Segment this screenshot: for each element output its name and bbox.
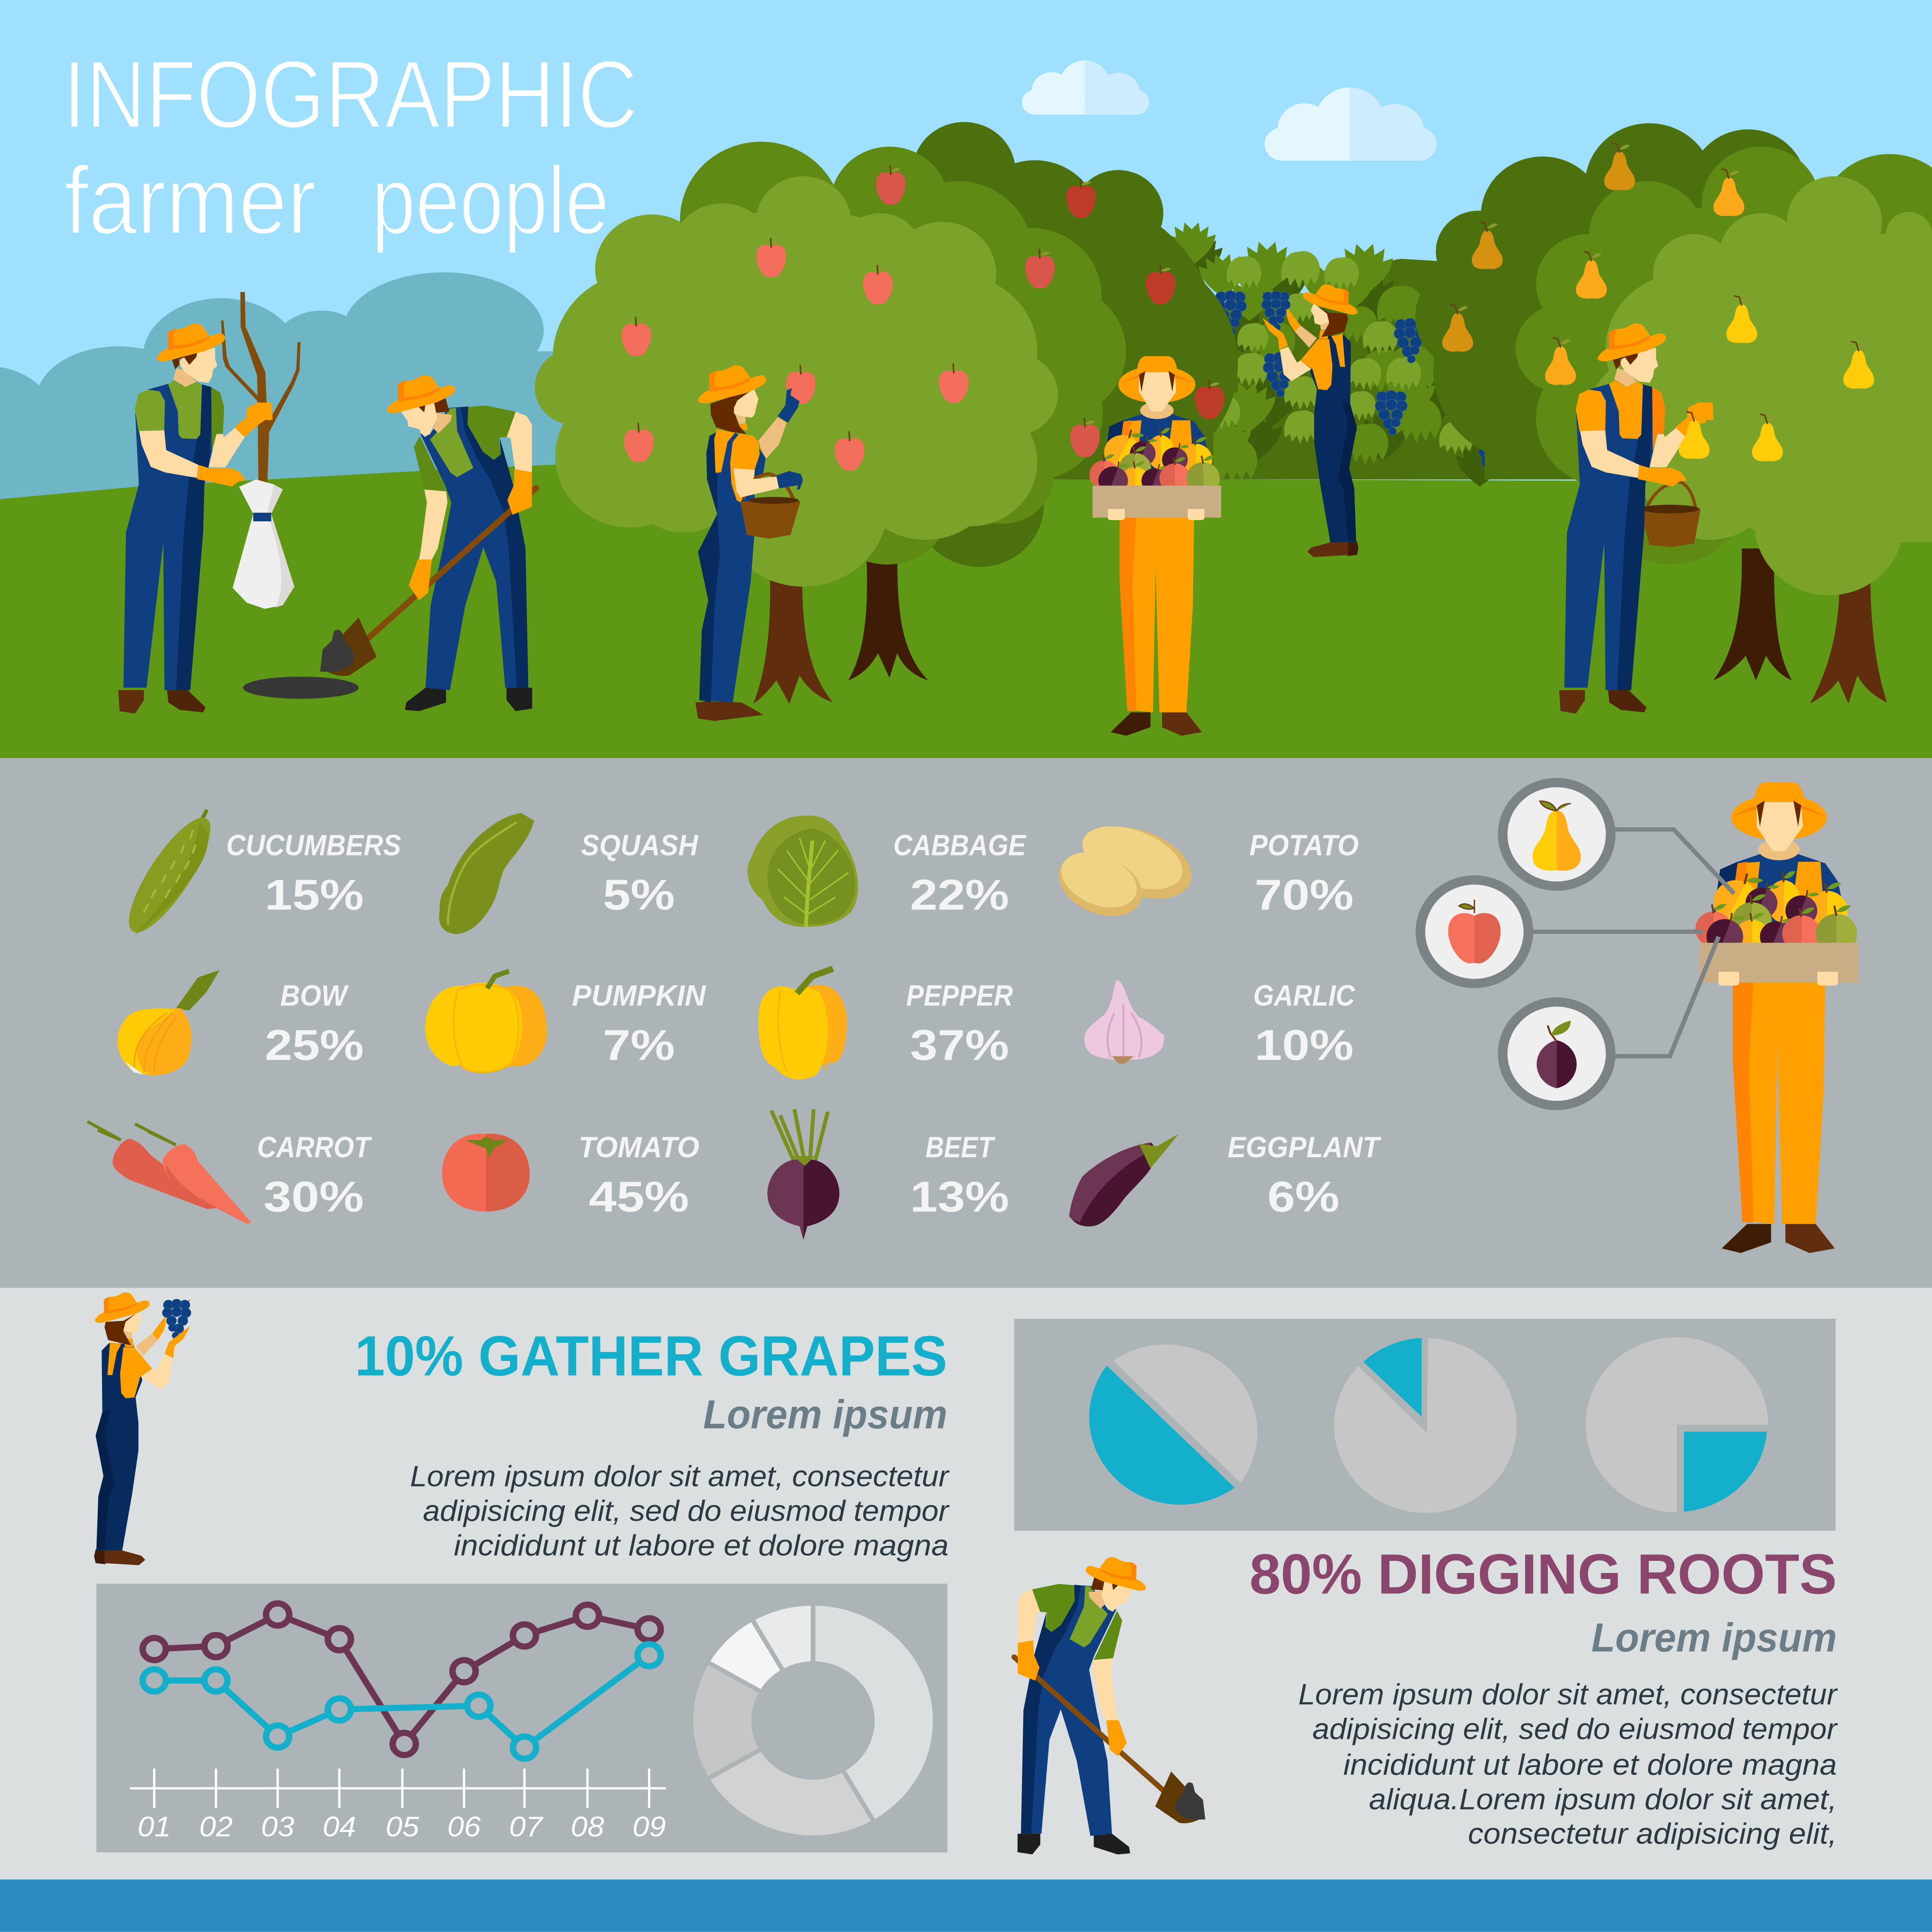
- vegetable labels: GARLIC: [1253, 979, 1355, 1012]
- icon: beet: [767, 1109, 839, 1240]
- farmer picking pears: [1559, 323, 1713, 714]
- icon: carrots: [87, 1122, 251, 1224]
- subheading: Lorem ipsum: [703, 1392, 947, 1437]
- pear trees: [1415, 123, 1932, 704]
- sapling: [221, 292, 301, 483]
- back pear tree: [1415, 123, 1806, 480]
- heading: gather grapes: 10% GATHER GRAPES: [355, 1324, 947, 1388]
- vegetable labels: 5%: [603, 871, 675, 919]
- series: blue: [143, 1644, 661, 1759]
- axis labels: 04: [323, 1811, 356, 1842]
- vegetable labels: CUCUMBERS: [226, 828, 401, 862]
- vegetable labels: 70%: [1255, 871, 1354, 919]
- axis labels: 07: [509, 1811, 543, 1842]
- light leaves: [1206, 251, 1474, 455]
- axis: [130, 1769, 666, 1808]
- clouds: [1022, 60, 1437, 161]
- text block: digging roots: adipisicing elit, sed do eiusmod tempor: [1313, 1712, 1838, 1745]
- axis labels: 02: [199, 1811, 233, 1842]
- icon: tomato: [442, 1134, 530, 1211]
- vegetable labels: 7%: [603, 1021, 675, 1070]
- vegetable labels: CABBAGE: [893, 828, 1027, 862]
- vegetable labels: PEPPER: [906, 979, 1013, 1012]
- vegetable labels: BOW: [280, 979, 349, 1012]
- tree trunks: [753, 554, 928, 704]
- grape vines: [1168, 223, 1504, 486]
- donut chart: [691, 1604, 935, 1838]
- front tree: [535, 176, 1058, 587]
- man digging: [1014, 1557, 1205, 1854]
- icon: garlic: [1084, 980, 1164, 1064]
- text block: digging roots: incididunt ut labore et dolore magna: [1343, 1748, 1837, 1781]
- farmer digging: [320, 375, 536, 711]
- vegetable labels: 22%: [910, 871, 1009, 919]
- axis labels: 03: [261, 1811, 294, 1842]
- vegetable labels: 13%: [910, 1173, 1009, 1221]
- icon: apple circle: [1420, 880, 1528, 983]
- subheading: Lorem ipsum: [1591, 1615, 1837, 1660]
- text block: gather grapes: incididunt ut labore et dolore magna: [454, 1529, 949, 1562]
- vegetable labels: BEET: [925, 1131, 996, 1164]
- farmer figure: [1696, 782, 1859, 1253]
- front pear tree: [1587, 176, 1932, 595]
- woman picking apples: [696, 365, 803, 721]
- farmer figure: [1559, 323, 1713, 714]
- pie 2: [1334, 1338, 1517, 1513]
- farmer planting sapling: [118, 292, 359, 714]
- line chart: [130, 1604, 666, 1842]
- text block: digging roots: Lorem ipsum dolor sit amet, consectetur: [1298, 1678, 1838, 1711]
- ground: [0, 460, 1932, 759]
- footer bar: [0, 1879, 1932, 1932]
- text block: digging roots: [1298, 1678, 1838, 1850]
- apples: [621, 165, 1225, 471]
- axis labels: 09: [633, 1811, 666, 1842]
- vegetable labels: [226, 828, 1381, 1221]
- axis labels: 05: [386, 1811, 419, 1842]
- vegetable labels: 37%: [910, 1021, 1009, 1070]
- hole: [243, 677, 359, 699]
- icon: pumpkin: [425, 971, 547, 1072]
- root sack: [233, 480, 294, 609]
- vegetable labels: 45%: [589, 1173, 689, 1221]
- panel: pie charts: [1014, 1319, 1835, 1531]
- vegetable labels: 15%: [265, 871, 364, 919]
- vegetable labels: POTATO: [1250, 828, 1359, 862]
- background: sky: [0, 0, 1932, 759]
- pears: [1442, 143, 1874, 461]
- apple trees: [535, 122, 1238, 704]
- farmer with fruit callouts: [1420, 782, 1859, 1253]
- grapes: [1214, 291, 1495, 474]
- vegetable labels: EGGPLANT: [1228, 1131, 1381, 1164]
- panel: vegetables: [0, 758, 1932, 1288]
- icon: squash: [439, 813, 534, 934]
- icon: cucumber: [116, 808, 224, 942]
- heading: digging roots: 80% DIGGING ROOTS: [1250, 1542, 1837, 1605]
- woman picking grapes: [1262, 284, 1359, 557]
- farmer figure: [118, 323, 272, 714]
- middle pear tree: [1515, 147, 1932, 565]
- icon: plum circle: [1503, 1002, 1611, 1105]
- vegetable labels: 6%: [1267, 1173, 1339, 1221]
- pie 1: [1089, 1344, 1257, 1505]
- middle tree: [680, 142, 1126, 565]
- title: people: [371, 146, 609, 254]
- text block: gather grapes: adipisicing elit, sed do eiusmod tempor: [423, 1494, 950, 1527]
- icon: eggplant: [1069, 1134, 1179, 1226]
- vegetable labels: CARROT: [257, 1131, 372, 1164]
- text block: gather grapes: [410, 1459, 950, 1562]
- title: [63, 41, 638, 254]
- distant hills: [0, 272, 591, 505]
- icon: pepper: [759, 969, 847, 1080]
- back tree: [913, 122, 1238, 567]
- pear in hand: [1679, 404, 1709, 459]
- basket: [1640, 482, 1701, 547]
- bottom section background: [0, 1288, 1932, 1879]
- axis labels: 06: [447, 1811, 481, 1842]
- vegetable labels: 30%: [264, 1173, 364, 1221]
- icon: pear circle: [1503, 782, 1611, 886]
- mid leaves: [1168, 223, 1441, 484]
- dark leaves: [1179, 236, 1504, 486]
- icon: potato: [1048, 813, 1202, 928]
- vegetable labels: TOMATO: [578, 1131, 699, 1164]
- icon: cabbage: [748, 816, 858, 927]
- axis labels: [138, 1811, 666, 1842]
- trunks: [1713, 548, 1887, 704]
- series: purple: [143, 1604, 661, 1755]
- text block: digging roots: consectetur adipisicing elit,: [1468, 1817, 1837, 1850]
- vegetable labels: SQUASH: [581, 828, 699, 862]
- icon: onion: [117, 970, 220, 1075]
- axis labels: 08: [571, 1811, 604, 1842]
- title: farmer: [64, 146, 316, 254]
- text block: digging roots: aliqua.Lorem ipsum dolor sit amet,: [1369, 1782, 1837, 1816]
- farmer holding fruit crate: [1089, 356, 1221, 736]
- vegetable labels: 10%: [1255, 1021, 1354, 1070]
- vegetable labels: PUMPKIN: [572, 979, 706, 1012]
- hedge behind the vines: [1208, 259, 1491, 480]
- title: INFOGRAPHIC: [63, 41, 638, 148]
- text block: gather grapes: Lorem ipsum dolor sit amet, consectetur: [410, 1459, 950, 1493]
- panel: line chart and donut: [97, 1584, 947, 1852]
- pie 3: [1585, 1337, 1768, 1512]
- vegetable labels: 25%: [265, 1021, 364, 1070]
- axis labels: 01: [138, 1811, 171, 1842]
- connector lines: [1532, 830, 1734, 1056]
- basket: [733, 468, 803, 539]
- woman with grapes: [94, 1293, 191, 1565]
